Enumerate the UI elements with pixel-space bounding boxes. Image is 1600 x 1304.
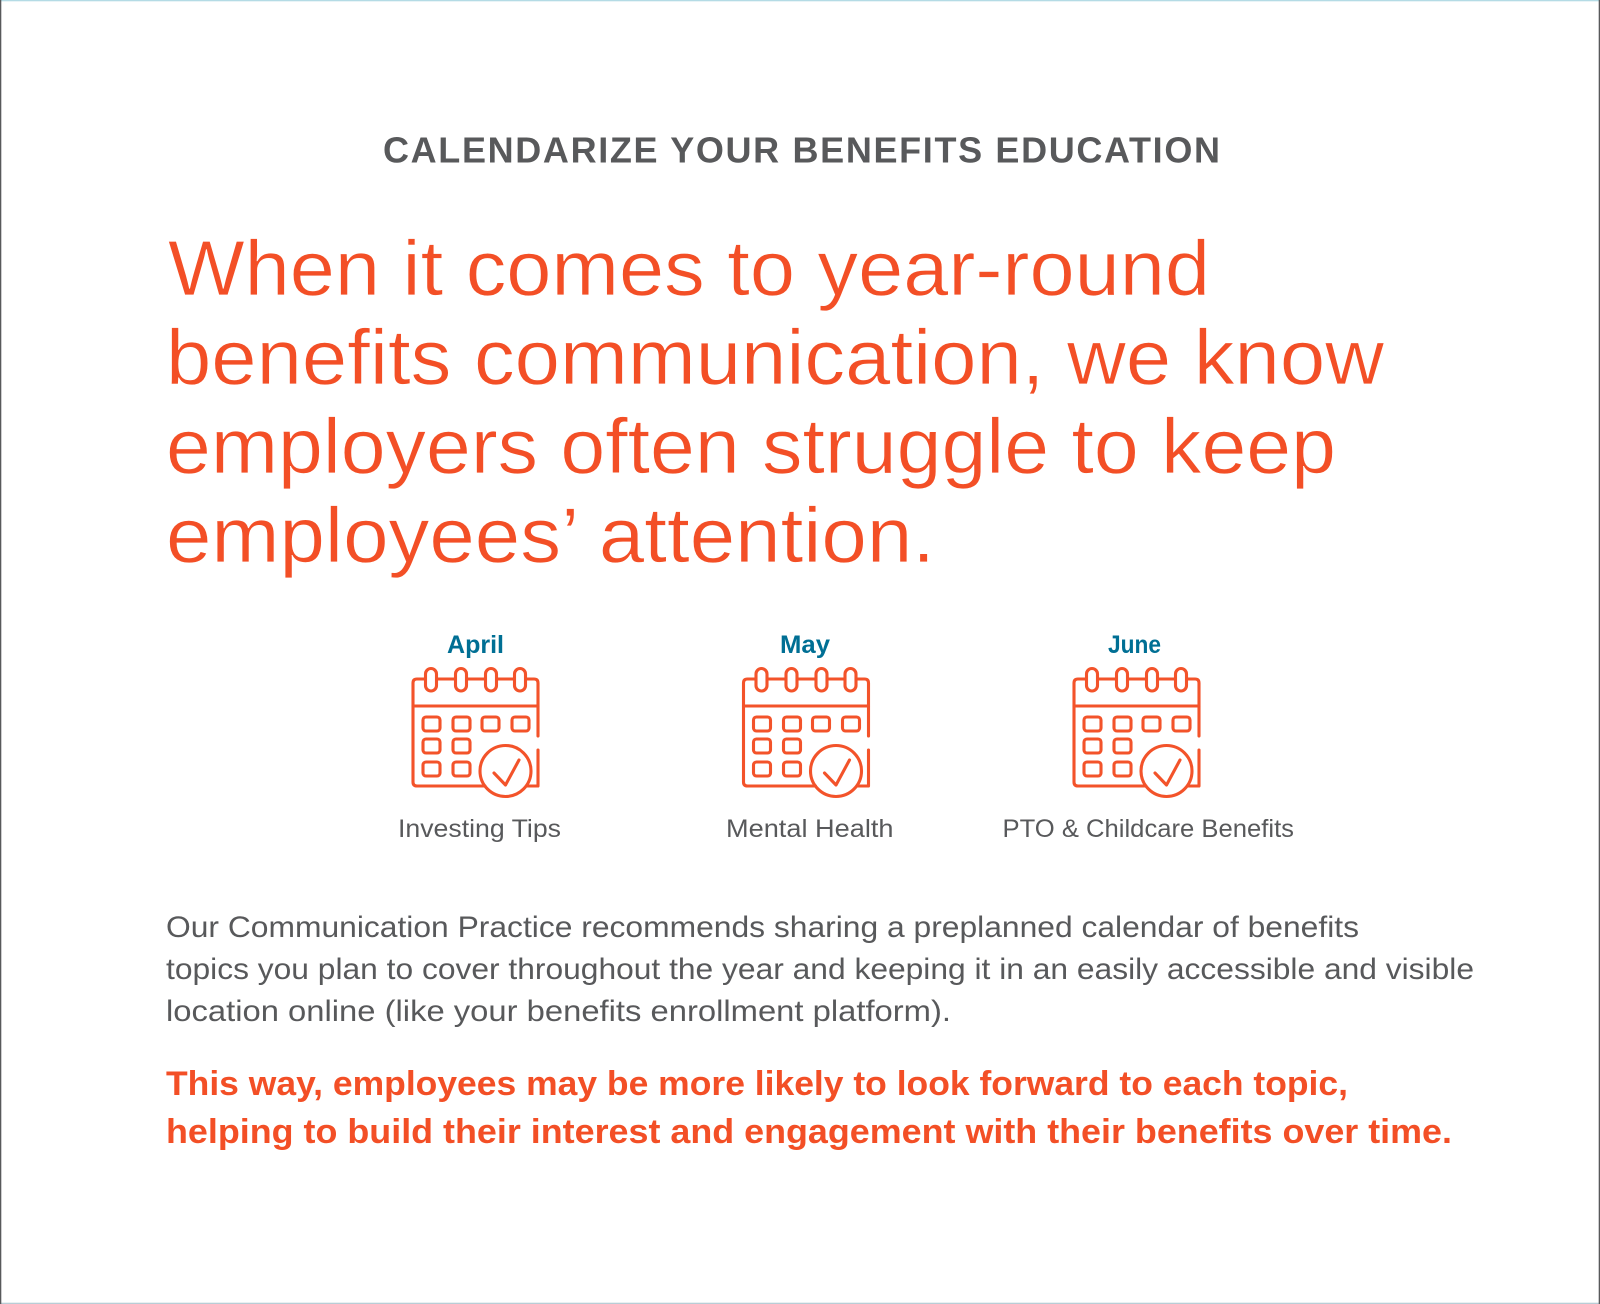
headline: When it comes to year-round [168, 224, 1210, 312]
month label: June: June [1108, 631, 1161, 659]
body paragraph [166, 911, 1474, 1028]
panel: May calendar topic [726, 631, 894, 843]
icon: calendar with check mark [744, 668, 868, 796]
highlighted conclusion: This way, employees may be more likely to look forward to each topic, [166, 1065, 1348, 1103]
caption: PTO and Childcare Benefits: PTO & Childcare Benefits [1002, 815, 1294, 843]
headline: employees’ attention. [166, 491, 935, 579]
caption: Investing Tips: Investing Tips [398, 815, 561, 843]
body paragraph: location online (like your benefits enrollment platform). [166, 995, 951, 1028]
headline: benefits communication, we know [166, 313, 1385, 401]
caption: Mental Health: Mental Health [726, 815, 894, 843]
panel: June calendar topic [1002, 631, 1294, 843]
highlighted conclusion: helping to build their interest and engagement with their benefits over time. [166, 1113, 1452, 1151]
headline [166, 224, 1385, 579]
icon: calendar with check mark [1074, 668, 1199, 796]
headline: employers often struggle to keep [166, 402, 1336, 490]
panel: April calendar topic [398, 631, 561, 843]
month label: May: May [780, 631, 830, 659]
body paragraph: topics you plan to cover throughout the year and keeping it in an easily accessible and visible [166, 953, 1474, 986]
highlighted conclusion [166, 1065, 1452, 1151]
body paragraph: Our Communication Practice recommends sharing a preplanned calendar of benefits [166, 911, 1359, 944]
month label: April: April [447, 631, 504, 659]
title: CALENDARIZE YOUR BENEFITS EDUCATION [383, 130, 1220, 170]
icon: calendar with check mark [413, 668, 538, 796]
